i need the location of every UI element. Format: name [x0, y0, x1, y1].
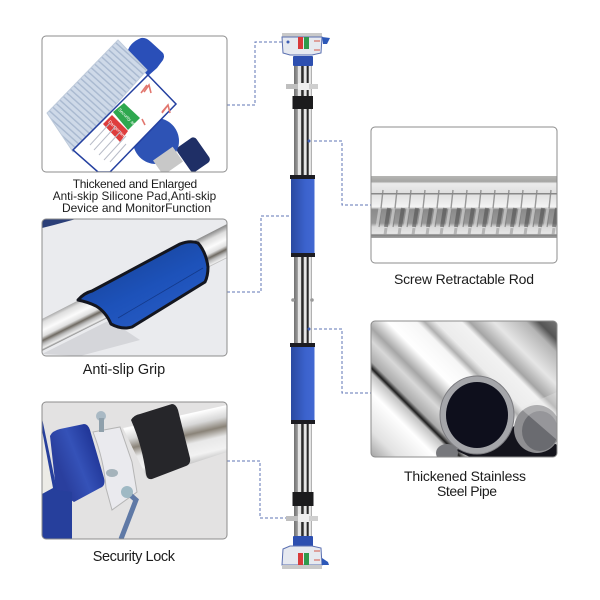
- icon: second grip corner: [42, 220, 74, 228]
- icon: blue cylinder: [50, 424, 104, 502]
- icon: small pipe left: [436, 444, 458, 456]
- caption: stainless steel pipe: Thickened Stainless: [404, 468, 526, 484]
- caption: stainless steel pipe: Steel Pipe: [437, 483, 497, 499]
- connector: anti-slip grip callout: [227, 216, 293, 292]
- icon: main pipe opening: [440, 376, 514, 454]
- caption: anti-skip pad: [53, 177, 217, 215]
- top head plate: [282, 33, 330, 66]
- panel: screw rod photo: [371, 127, 557, 263]
- middle rod section: [294, 256, 312, 344]
- bottom shadow: [457, 426, 556, 456]
- bottom clamp: [286, 514, 318, 522]
- icon: hex key: [121, 492, 136, 539]
- panel: anti-skip pad photo: [42, 36, 227, 175]
- icon: blue body and cap: [134, 119, 210, 172]
- panel: security lock photo: [42, 402, 227, 539]
- bottom head plate: [282, 536, 329, 569]
- icon: diagonal pipes: [371, 321, 557, 457]
- caption: security lock: Security Lock: [93, 549, 176, 565]
- upper blue grip: [290, 175, 315, 257]
- callout dots on rods: [308, 140, 310, 330]
- panel: stainless steel pipe photo: [371, 321, 560, 462]
- caption: screw rod: Screw Retractable Rod: [394, 271, 534, 287]
- icon: steel rod: [42, 224, 227, 351]
- icon: threaded rod: [371, 176, 557, 238]
- icon: clear silicone pad: [47, 40, 147, 152]
- connector: anti-skip pad callout: [227, 42, 288, 105]
- center pin: [291, 298, 314, 302]
- caption: anti-slip grip: Anti-slip Grip: [83, 362, 165, 378]
- panel: anti-slip grip photo: [42, 219, 227, 356]
- icon: blue end bracket: [128, 38, 164, 76]
- icon: small pipe behind: [514, 392, 560, 453]
- icon: steel tube: [123, 405, 227, 478]
- icon: blue base box: [42, 418, 72, 539]
- rod shadow: [42, 320, 140, 356]
- caption: anti-skip pad: Device and MonitorFunction: [62, 201, 211, 215]
- bottom rod section: [294, 424, 312, 536]
- lower blue grip: [290, 343, 315, 424]
- icon: black rubber ring: [131, 404, 190, 479]
- icon: metal clamp: [93, 411, 137, 510]
- connector: screw rod callout: [309, 141, 371, 205]
- icon: blue neoprene sleeve: [78, 242, 208, 328]
- pole product: [282, 33, 330, 569]
- icon: instruction label: [73, 75, 176, 172]
- red danger tag: Danger area: [107, 119, 129, 141]
- top clamp: [286, 83, 318, 90]
- bottom black band: [292, 492, 314, 506]
- connector: steel pipe callout: [309, 329, 371, 393]
- caption: stainless steel pipe: [404, 468, 526, 499]
- connector: security lock callout: [227, 461, 295, 518]
- caption: anti-skip pad: Anti-skip Silicone Pad,Anti-skip: [53, 189, 217, 203]
- top rod section: [294, 66, 312, 176]
- green security tag: Security area: [117, 107, 140, 130]
- top black band: [292, 96, 313, 109]
- caption: anti-skip pad: Thickened and Enlarged: [73, 177, 197, 191]
